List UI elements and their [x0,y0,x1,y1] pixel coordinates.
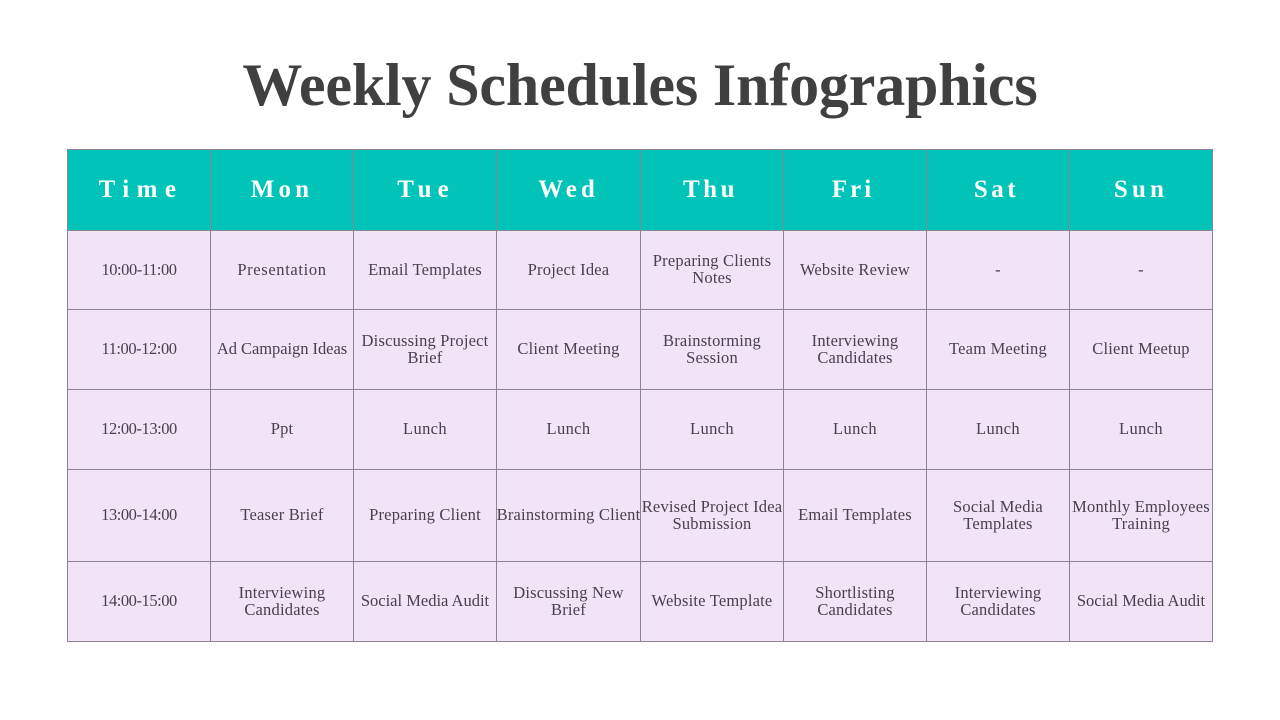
row: 14:00-15:00: Interviewing [955,582,1041,602]
row: 10:00-11:00: Project Idea [528,260,609,278]
row: 12:00-13:00: Lunch [976,419,1020,438]
row: 11:00-12:00: Candidates [817,348,893,366]
row: 13:00-14:00: Brainstorming Client [497,505,640,524]
row: 11:00-12:00: Brainstorming [663,330,761,350]
row: 14:00-15:00: Candidates [817,600,893,618]
row: 11:00-12:00: Discussing Project [362,330,488,350]
row: 12:00-13:00: Lunch [690,419,734,438]
row: 14:00-15:00: Candidates [960,600,1036,618]
row: 12:00-13:00: 12:00-13:00 [101,419,177,438]
row: 14:00-15:00: 14:00-15:00 [101,591,177,610]
row: 13:00-14:00: 13:00-14:00 [101,505,177,524]
header: Sat [927,150,1069,230]
row: 11:00-12:00: Session [686,348,738,366]
header: Tue: Tue [397,176,455,203]
row: 14:00-15:00: Candidates [244,600,320,618]
row: 10:00-11:00: Preparing Clients [653,251,771,270]
header: Sun: Sun [1114,176,1168,203]
header: Sat: Sat [974,176,1019,203]
row: 13:00-14:00: Email Templates [798,505,912,524]
row: 11:00-12:00: Brief [408,348,442,366]
row: 12:00-13:00 [68,390,1212,469]
row: 12:00-13:00: Lunch [833,419,877,438]
row: 14:00-15:00 [68,562,1212,641]
header: Wed [497,150,640,230]
row: 13:00-14:00: Templates [963,514,1033,532]
row: 11:00-12:00: Team Meeting [949,339,1047,358]
row: 10:00-11:00: 10:00-11:00 [101,260,177,278]
row: 10:00-11:00: Presentation [237,260,327,278]
row: 14:00-15:00: Interviewing [239,582,325,602]
row: 10:00-11:00: - [1138,260,1144,278]
header: Thu [641,150,783,230]
row: 11:00-12:00: 11:00-12:00 [101,339,177,358]
row: 14:00-15:00: Shortlisting [815,582,895,602]
title: Weekly Schedules Infographics [242,52,1038,118]
row: 11:00-12:00: Client Meeting [517,339,620,358]
header: Thu: Thu [683,176,738,203]
row: 14:00-15:00: Website Template [652,591,772,610]
header: Tue [354,150,496,230]
row: 10:00-11:00 [68,231,1212,309]
header: Time [68,150,210,230]
header: Mon: Mon [251,176,313,203]
row: 12:00-13:00: Lunch [403,419,447,438]
row: 11:00-12:00: Interviewing [812,330,898,350]
schedule table [67,149,1213,642]
row: 13:00-14:00: Teaser Brief [240,505,324,524]
row: 10:00-11:00: Email Templates [368,260,482,278]
row: 13:00-14:00: Revised Project Idea [642,496,782,516]
header row: days of week [68,150,1212,230]
row: 14:00-15:00: Discussing New [513,582,624,602]
row: 11:00-12:00: Ad Campaign Ideas [217,339,347,358]
header: Fri [784,150,926,230]
row: 14:00-15:00: Brief [551,600,586,618]
row: 11:00-12:00 [68,310,1212,389]
row: 13:00-14:00 [68,470,1212,561]
row: 12:00-13:00: Lunch [547,419,590,438]
row: 13:00-14:00: Social Media [953,496,1043,516]
row: 10:00-11:00: Website Review [800,260,910,278]
row: 11:00-12:00: Client Meetup [1092,339,1190,358]
row: 12:00-13:00: Ppt [271,419,293,438]
row: 13:00-14:00: Submission [672,514,752,532]
header: Wed: Wed [538,176,599,203]
header: Sun [1070,150,1212,230]
header: Mon [211,150,353,230]
row: 12:00-13:00: Lunch [1119,419,1163,438]
header: Fri: Fri [832,176,874,203]
row: 10:00-11:00: - [995,260,1001,278]
row: 10:00-11:00: Notes [692,268,732,287]
row: 14:00-15:00: Social Media Audit [1077,591,1205,610]
row: 13:00-14:00: Training [1112,514,1170,532]
row: 14:00-15:00: Social Media Audit [361,591,489,610]
row: 13:00-14:00: Monthly Employees [1072,496,1210,516]
header: Time: Time [99,176,183,203]
row: 13:00-14:00: Preparing Client [369,505,481,524]
